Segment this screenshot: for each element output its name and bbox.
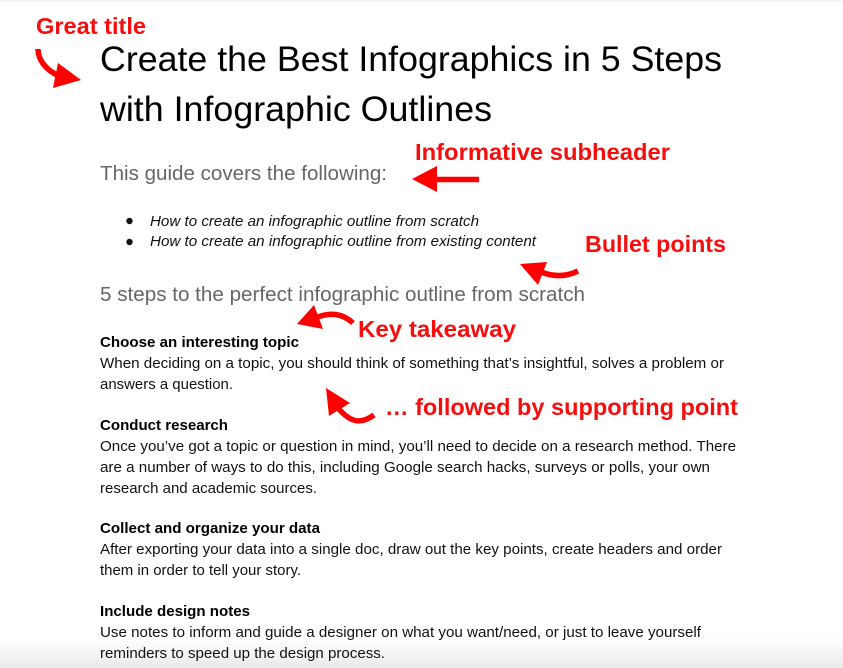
step: collect and organize data: After exporting your data into a single doc, draw out the key points, create headers and order bbox=[100, 542, 722, 558]
step: conduct research bbox=[100, 418, 736, 497]
subheader: guide coverage: This guide covers the following: bbox=[100, 162, 387, 185]
step: choose a topic bbox=[100, 335, 724, 393]
step: include design notes bbox=[100, 604, 702, 662]
step: include design notes: Include design notes bbox=[100, 604, 250, 620]
arrow: to title bbox=[38, 49, 81, 88]
bullet list bbox=[126, 214, 537, 250]
callout: informative subheader: Informative subheader bbox=[415, 139, 670, 165]
step: include design notes: reminders to speed up the design process. bbox=[100, 646, 385, 662]
step: choose a topic: answers a question. bbox=[100, 377, 233, 393]
title: Create the Best Infographics in 5 Steps bbox=[100, 39, 722, 79]
step: collect and organize data: Collect and organize your data bbox=[100, 521, 321, 537]
callout: supporting point: … followed by supporting point bbox=[385, 394, 738, 420]
title bbox=[99, 39, 722, 129]
arrow: to bullets bbox=[520, 262, 578, 285]
title: with Infographic Outlines bbox=[99, 89, 492, 129]
step: choose a topic: Choose an interesting topic bbox=[100, 335, 299, 351]
callout: key takeaway: Key takeaway bbox=[358, 316, 516, 342]
arrow: to supporting point bbox=[326, 388, 374, 421]
step: choose a topic: When deciding on a topic, you should think of something that’s insightful, solves a problem or bbox=[100, 356, 724, 372]
arrow: to key takeaway bbox=[297, 305, 353, 329]
step: include design notes: Use notes to inform and guide a designer on what you want/need, or just to leave yourself bbox=[100, 625, 702, 641]
callout: great title: Great title bbox=[36, 13, 146, 39]
bullet list: How to create an infographic outline from existing content bbox=[150, 234, 537, 250]
step: conduct research: are a number of ways to do this, including Google search hacks, surveys or polls, your own bbox=[100, 460, 710, 476]
callout: bullet points: Bullet points bbox=[585, 231, 726, 257]
step: collect and organize data: them in order to tell your story. bbox=[100, 563, 301, 579]
step: collect and organize data bbox=[100, 521, 722, 579]
bullet list: How to create an infographic outline from scratch bbox=[150, 214, 479, 230]
step: conduct research: Once you’ve got a topic or question in mind, you’ll need to decide on a research method. There bbox=[100, 439, 736, 455]
subheader: five steps: 5 steps to the perfect infographic outline from scratch bbox=[100, 283, 585, 306]
step: conduct research: research and academic sources. bbox=[100, 481, 317, 497]
arrow: to subheader bbox=[412, 166, 479, 192]
step: conduct research: Conduct research bbox=[100, 418, 228, 434]
